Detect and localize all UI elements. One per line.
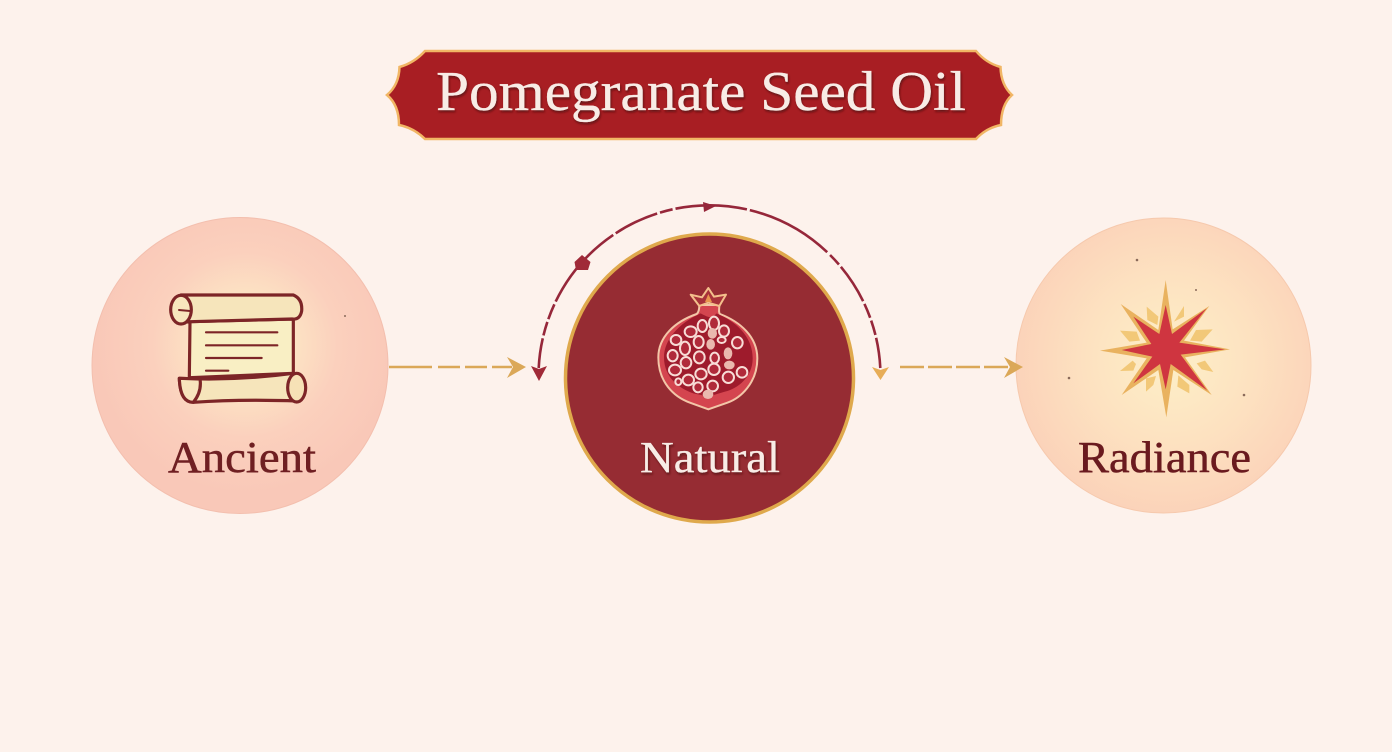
title banner (387, 51, 1012, 139)
light seeds (703, 328, 735, 399)
panel: radiance (1016, 218, 1311, 513)
seeds (668, 317, 747, 392)
crown (691, 288, 726, 306)
label: Ancient (168, 433, 316, 482)
label: Natural (640, 433, 780, 482)
panel: natural (566, 234, 854, 522)
dashed arrow: natural to radiance (900, 357, 1023, 378)
diamond marker (574, 255, 590, 270)
circle (92, 218, 388, 514)
speck (344, 315, 346, 317)
icon: star burst (1100, 280, 1230, 417)
label: Radiance (1078, 433, 1251, 482)
icon: pomegranate (658, 288, 757, 409)
circular arc arrow around natural (531, 202, 889, 381)
banner plaque (387, 51, 1012, 139)
circle (566, 234, 854, 522)
circle (1016, 218, 1311, 513)
arrowhead left (531, 366, 547, 381)
title: Pomegranate Seed Oil (436, 61, 966, 123)
icon: scroll (171, 295, 306, 402)
dashed arrow: ancient to natural (389, 357, 526, 378)
gold star (1100, 280, 1230, 417)
apex arrow (703, 202, 716, 212)
panel: ancient (92, 218, 388, 514)
red star (1122, 305, 1225, 391)
specks (1068, 259, 1245, 396)
arrowhead right (872, 367, 889, 380)
shards (1120, 306, 1213, 393)
